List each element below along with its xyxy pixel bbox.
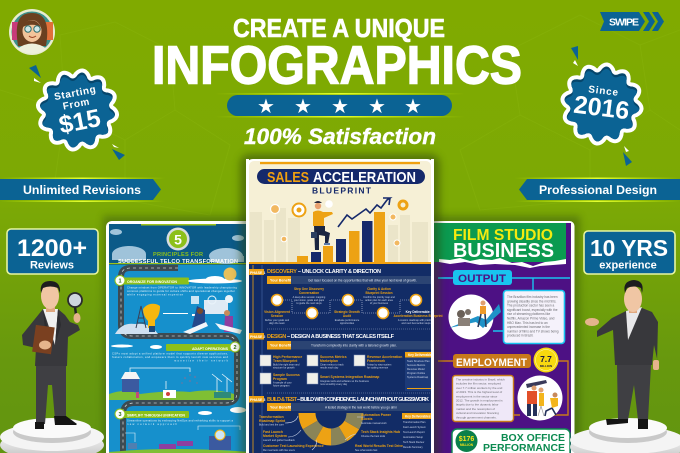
- phase 3: build and test: Roadmap Sprint: [259, 419, 286, 423]
- swipe tag: [600, 12, 664, 31]
- phase 2: design: Marketplan: [320, 359, 338, 363]
- badge: since 2016: 2016: [572, 91, 631, 125]
- section 3: simplify through unification: SIMPLIFY THROUGH UNIFICATION: [127, 414, 185, 418]
- section 1: organize for innovation: common platforms to guide for culture shifts and operational changes together: [127, 289, 235, 293]
- badge: since 2016: [564, 66, 640, 144]
- employment section: 2012. The growth in employment is: [456, 398, 503, 402]
- section 3: simplify through unification: Streamline operations by embracing NetOps and rethinking skills to support a: [127, 418, 234, 422]
- experience box: [584, 231, 675, 274]
- box office section: [452, 429, 570, 453]
- phase 2: design: Framework: [367, 359, 385, 363]
- telco heading: PRINCIPLES FOR: [153, 252, 203, 258]
- badge decorations right: [571, 46, 632, 166]
- output section: produced in Brazil.: [507, 334, 534, 338]
- phase 3: build and test: Real World Results Test Drive: [355, 444, 403, 448]
- semicircle diagram: [307, 413, 355, 437]
- star rating bar: [215, 93, 465, 118]
- output section: number of films and TV shows being: [507, 329, 559, 333]
- phase 1: discovery: DISCOVERY – UNLOCK CLARITY & DIRECTION: [267, 269, 381, 275]
- experience box: 10 YRS: [590, 235, 668, 261]
- phase 3: build and test: Your Benefit: [270, 406, 292, 410]
- output section: [438, 270, 570, 344]
- employment section: largely due to the dynamic labor: [456, 403, 499, 407]
- section 3: simplify through unification: new network approach: [127, 422, 178, 426]
- employment section: cultural and innovation financing: [456, 411, 499, 415]
- phase 3: build and test: [248, 396, 433, 452]
- right businessman gesturing: [585, 280, 659, 429]
- phase 1: discovery: Your Benefit: [270, 278, 292, 282]
- phase 3: build and test: See what works fast: [355, 449, 378, 452]
- phase 2: design: Transform complexity into clarity with a tailored growth plan.: [311, 344, 397, 348]
- employment section: EMPLOYMENT: [456, 357, 527, 369]
- phase 3: build and test: Launch and gather feedback: [263, 439, 295, 442]
- phase 1: discovery: Session: [271, 314, 283, 318]
- output section: OUTPUT: [458, 273, 506, 285]
- phase 3: build and test: Automate manual work: [361, 422, 387, 425]
- phase 2: design: Program: [273, 377, 287, 381]
- phase 3: build and test: Test Launch Report: [403, 431, 425, 434]
- film studio title: [453, 227, 554, 262]
- phase 2: design: structure for growth: [273, 366, 295, 370]
- output section: Netflix, Amazon Prime Video, and: [507, 316, 555, 320]
- phase 2: design: Revenue Model: [407, 368, 425, 371]
- star rating bar: ★: [294, 96, 312, 118]
- number badge: [166, 228, 190, 250]
- phase 3: build and test: Choose the best tools: [361, 435, 386, 438]
- floating icons: [270, 200, 407, 246]
- phase 1: discovery: Evaluate performance: [335, 319, 360, 322]
- panel: film studio business infographic: [430, 216, 580, 453]
- film studio title: BUSINESS: [453, 239, 554, 262]
- header clouds: [110, 229, 244, 264]
- output section: growing steadily since the mid 90s.: [507, 299, 557, 303]
- phase 3: build and test: Tech Stack Review: [403, 441, 424, 444]
- section 1: organize for innovation: while engaging external expertise: [127, 292, 184, 296]
- satisfaction text: 100% Satisfaction: [244, 124, 436, 149]
- title: infographics: INFOGRAPHICS: [152, 36, 522, 96]
- white side rails: [246, 159, 434, 453]
- phase 1: discovery: and next best action steps: [401, 322, 431, 325]
- phase 2: design: DESIGN – DESIGN A BUSINESS THAT SCALES ITSELF: [267, 334, 395, 340]
- badge decorations left: [29, 65, 125, 160]
- phase 1: discovery: Audit: [343, 314, 352, 318]
- swipe tag: SWIPE: [609, 16, 639, 28]
- phase 1: discovery: A custom roadmap with priorities: [398, 319, 435, 322]
- road: [121, 268, 237, 453]
- phase 1: discovery: PHASE 1: [250, 271, 265, 275]
- phase 3: build and test: BUILD & TEST – BUILD WITH CONFIDENCE, LAUNCH WITHOUT GUESSWORK: [267, 397, 429, 403]
- experience box: experience: [599, 260, 657, 272]
- timeline rail: [253, 265, 262, 453]
- box office section: $176: [459, 436, 474, 443]
- box office section: BOX OFFICE: [501, 432, 565, 444]
- climbing person: [311, 201, 333, 250]
- output section: The Brazilian film industry has been: [507, 295, 558, 299]
- torn paper edge: [439, 258, 566, 268]
- star rating bar: ★: [331, 96, 349, 118]
- phase 2: design: Revenue Acceleration: [367, 355, 402, 359]
- section 2: adapt operations: ADAPT OPERATIONS: [192, 347, 229, 351]
- phase 1: discovery: Acceleration Business Blueprint: [393, 314, 443, 318]
- badge: starting from $15: Starting: [53, 84, 97, 103]
- phase 3: build and test: Automation Setup: [403, 436, 423, 439]
- phase 3: build and test: Tech Stack Insights Hub: [361, 430, 400, 434]
- section 2: adapt operations: CSPs must adopt a unified platform model that supports diverse applications,: [112, 352, 228, 356]
- telco heading: [118, 252, 238, 265]
- ribbon: professional design: [515, 178, 680, 202]
- phase 3: build and test: Run real tests with live users: [263, 449, 296, 452]
- phase 3: build and test: Transformation Plan: [403, 421, 426, 424]
- subtitle: BLUEPRINT: [312, 186, 372, 196]
- phase 2: design: Integrate tools and software so the business: [320, 380, 370, 383]
- left podium: [0, 418, 104, 453]
- title pill: [257, 169, 425, 186]
- section 3: simplify through unification: [109, 407, 252, 453]
- phase 2: design: runs smoothly every day: [320, 383, 348, 386]
- phase 2: design: High Performance: [273, 355, 302, 359]
- phase 2: design: A step by step system: [367, 364, 391, 366]
- phase 1: discovery: Step One Discovery: [294, 287, 324, 291]
- phase 3: build and test: Key Deliverables: [405, 414, 431, 418]
- number badge: 5: [174, 232, 182, 248]
- telco heading: SUCCESSFUL TELCO TRANSFORMATION: [118, 259, 238, 265]
- phase 2: design: Systems Roadmap: [407, 376, 429, 379]
- phase 1: discovery: Key Deliverable:: [406, 310, 430, 314]
- bar chart: [297, 212, 385, 262]
- employment section: market and the resumption of: [456, 407, 495, 411]
- phase 2: design: [248, 333, 434, 393]
- magnifier: [68, 293, 82, 322]
- title pill: SALES: [267, 170, 309, 186]
- phase 3: build and test: A tested strategy in the real world before you go all in: [325, 406, 397, 410]
- employment section: over 7.7 million workers by the end: [456, 386, 503, 390]
- phase 1: discovery: Confirm the priority map and: [363, 296, 395, 299]
- phase 1: discovery: your vision, goals and gaps: [294, 299, 325, 302]
- phase 1: discovery: Vision Alignment: [264, 310, 291, 314]
- trend arrow: [338, 198, 390, 227]
- badge: starting from $15: [40, 72, 115, 150]
- output section: HBO Max. This has led to an: [507, 321, 548, 325]
- employment section: of 2023. This is the highest level of: [456, 390, 502, 394]
- right podium: [570, 418, 680, 453]
- reviews box: Reviews: [30, 260, 74, 272]
- phase 2: design: future program: [273, 384, 289, 388]
- phase 1: discovery: Clarity & Action: [367, 287, 391, 291]
- phase 2: design: Team Blueprint: [273, 359, 298, 363]
- panel: sales acceleration blueprint infographic: [240, 154, 443, 453]
- box office section: MILLION: [460, 443, 474, 447]
- output section: unprecedented increase in the: [507, 325, 550, 329]
- section 1: organize for innovation: Change mindset from OPERATOR to INNOVATOR with leadership championing: [127, 286, 238, 290]
- section 2: adapt operations: 2: [233, 345, 237, 351]
- output section: significant boost, especially with the: [507, 308, 558, 312]
- left businessman with magnifier: [22, 281, 82, 429]
- phase 3: build and test: Customer Test Launching Experience: [263, 444, 324, 448]
- ribbon: professional design: Professional Design: [539, 185, 657, 197]
- reviews box: [7, 229, 98, 274]
- phase 2: design: Success Metrics: [407, 364, 426, 367]
- output section: rise of streaming platforms like: [507, 312, 550, 316]
- phase 1: discovery: [248, 269, 443, 329]
- phase 2: design: PHASE 2: [250, 335, 265, 339]
- film studio title: FILM STUDIO: [453, 227, 553, 244]
- star rating bar: ★: [368, 96, 386, 118]
- phase 2: design: Program Outline: [407, 372, 426, 375]
- section 1: organize for innovation: 1: [118, 278, 122, 284]
- phase 3: build and test: Automation Power: [361, 413, 392, 417]
- phase 1: discovery: to guide the next steps: [296, 302, 322, 305]
- phase 2: design: Build the right team and: [273, 364, 300, 366]
- employment section: includes the film sector, employed: [456, 382, 501, 386]
- badge: since 2016: Since: [588, 84, 619, 99]
- phase 2: design: A sample of your: [273, 382, 292, 384]
- reviews box: 1200+: [17, 235, 87, 262]
- title pill: ACCELERATION: [313, 170, 416, 186]
- phase 1: discovery: align the team: [269, 322, 285, 325]
- phase 2: design: Key Deliverables: [408, 353, 434, 357]
- avatar: [9, 9, 55, 55]
- employment section: through government channels.: [456, 415, 497, 419]
- star rating bar: ★: [404, 96, 422, 118]
- phase 2: design: Success Metrics: [320, 355, 347, 359]
- phase 1: discovery: opportunities: [340, 322, 355, 325]
- section 2: adapt operations: fosters collaboration, and empowers them to quickly launch new services and: [112, 355, 228, 359]
- ribbon: unlimited revisions: [0, 178, 165, 202]
- phase 1: discovery: Conversation: [299, 291, 319, 295]
- skyline: [250, 208, 428, 262]
- employment section: The creative industry in Brazil, which: [456, 378, 505, 382]
- ribbon: unlimited revisions: Unlimited Revisions: [23, 185, 141, 197]
- section 1: organize for innovation: [115, 268, 242, 334]
- phase 2: design: Clear metrics to track: [320, 364, 344, 366]
- phase 2: design: for scaling revenue: [367, 366, 389, 370]
- phase 3: build and test: Fast Launch System: [403, 426, 426, 429]
- panel: telco transformation infographic: [103, 216, 253, 453]
- employment section: [438, 348, 568, 422]
- phase 2: design: results each day: [320, 366, 339, 370]
- phase 2: design: Smart Systems Integration Roadmap: [320, 375, 379, 379]
- phase 3: build and test: Results Summary: [403, 446, 423, 449]
- phase 1: discovery: Blueprint Session: [365, 291, 393, 295]
- phase 3: build and test: Market System: [263, 434, 287, 438]
- phase 2: design: Your Benefit: [270, 344, 292, 348]
- section 2: adapt operations: [109, 342, 240, 400]
- output section: The production sector has seen a: [507, 304, 555, 308]
- title: create a unique: CREATE A UNIQUE: [233, 13, 445, 43]
- phase 1: discovery: Get laser focused on the opportunities that will drive your next level of growth.: [308, 278, 417, 282]
- employment section: MILLION: [540, 364, 552, 368]
- section 3: simplify through unification: 3: [118, 412, 122, 418]
- phase 1: discovery: A deep-dive session mapping: [293, 296, 326, 299]
- phase 1: discovery: action plan for each area: [365, 299, 393, 302]
- badge: starting from $15: From: [62, 97, 91, 113]
- phase 3: build and test: Transformation: [259, 415, 284, 419]
- employment section: 7.7: [540, 354, 552, 364]
- phase 3: build and test: Fast Launch: [263, 430, 283, 434]
- section 2: adapt operations: monetize their network: [174, 358, 229, 362]
- phase 3: build and test: PHASE 3: [250, 398, 265, 402]
- section 1: organize for innovation: ORGANIZE FOR INNOVATION: [127, 280, 177, 284]
- phase 1: discovery: Define your goals and: [265, 319, 290, 322]
- phase 1: discovery: Strategic Growth: [334, 310, 360, 314]
- employment section: employment in the sector since: [456, 394, 498, 398]
- badge: starting from $15: $15: [57, 104, 103, 140]
- phase 1: discovery: of your business: [370, 302, 389, 305]
- star rating bar: ★: [257, 96, 275, 118]
- phase 3: build and test: Build and test the core: [259, 424, 284, 426]
- phase 2: design: Team Structure Plan: [407, 360, 430, 363]
- phase 2: design: Sample Success: [273, 373, 300, 377]
- phase 3: build and test: Boosts: [361, 417, 373, 421]
